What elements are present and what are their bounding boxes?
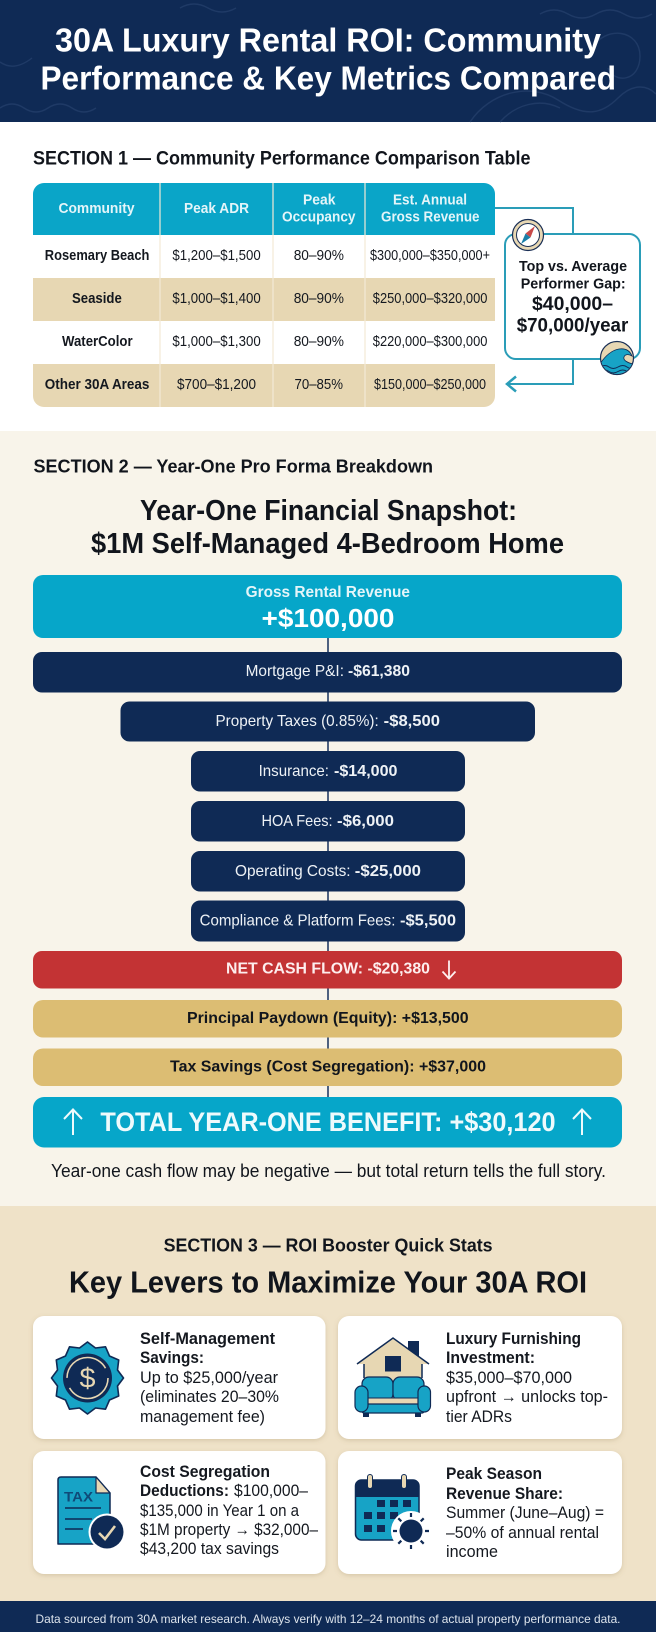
row: Rosemary Beach: Rosemary Beach — [45, 248, 149, 264]
bar: tax savings: Tax Savings (Cost Segregation): +$37,000 — [170, 1058, 486, 1076]
row: Rosemary Beach: $1,200–$1,500 — [172, 248, 261, 264]
comparison table — [33, 183, 495, 407]
callout: performer gap: $40,000– — [532, 293, 613, 315]
icon: tax document: TAX — [64, 1490, 93, 1504]
callout: performer gap — [505, 220, 640, 378]
icon: tax document — [58, 1477, 126, 1550]
bar: total year-one benefit — [33, 1097, 622, 1148]
row: Other 30A Areas: $150,000–$250,000 — [374, 377, 486, 393]
row: Seaside: Seaside — [72, 291, 122, 307]
footer: Data sourced from 30A market research. Always verify with 12–24 months of actual property performance data. — [36, 1612, 620, 1626]
card text: Investment: — [446, 1349, 535, 1367]
row: Other 30A Areas — [45, 377, 486, 393]
bar: gross rental revenue: Gross Rental Revenue — [246, 584, 410, 601]
section 1 heading: SECTION 1 — Community Performance Comparison Table — [33, 148, 530, 170]
icon: calendar and sun — [356, 1474, 431, 1551]
card text — [140, 1330, 279, 1426]
card text: Cost Segregation — [140, 1463, 270, 1481]
card text: $100,000– — [234, 1482, 309, 1500]
table header row: Occupancy — [282, 210, 356, 226]
bar: HOA fees — [191, 801, 465, 842]
card text: $1M property → $32,000– — [140, 1521, 319, 1539]
bar: insurance: Insurance: — [259, 763, 329, 780]
snapshot title — [91, 495, 564, 560]
bar: mortgage: Mortgage P&I: — [246, 663, 344, 680]
row: Seaside: $250,000–$320,000 — [373, 291, 487, 307]
row: Seaside: $1,000–$1,400 — [172, 291, 261, 307]
card text: Luxury Furnishing — [446, 1330, 581, 1348]
row: Seaside: 80–90% — [294, 291, 344, 307]
arrow: table to callout and back — [495, 208, 573, 392]
section 1 background — [0, 122, 656, 431]
bar: mortgage — [33, 652, 622, 692]
card text: (eliminates 20–30% — [140, 1388, 279, 1406]
card text: Savings: — [140, 1349, 204, 1367]
icon: dollar badge: $ — [80, 1362, 96, 1394]
icon: compass — [512, 220, 544, 250]
callout: performer gap: Top vs. Average — [519, 258, 627, 275]
card text: Self-Management — [140, 1330, 275, 1348]
row: WaterColor — [62, 334, 487, 350]
panel: section 3 quick stats — [0, 1206, 656, 1601]
card text: tier ADRs — [446, 1408, 512, 1426]
key levers title: Key Levers to Maximize Your 30A ROI — [69, 1264, 587, 1300]
waterfall connector — [327, 638, 329, 1097]
bar: mortgage: -$61,380 — [348, 663, 410, 680]
table header row: Est. Annual — [393, 193, 467, 209]
row: Other 30A Areas: $700–$1,200 — [177, 377, 256, 393]
bar: operating costs — [191, 851, 465, 892]
bar: property taxes: -$8,500 — [384, 713, 440, 730]
panel: section 2 pro forma — [0, 431, 656, 1206]
section 3 heading: SECTION 3 — ROI Booster Quick Stats — [164, 1234, 493, 1256]
table header row: Peak — [303, 193, 336, 209]
table header row: Community — [58, 201, 134, 217]
bar: operating costs: -$25,000 — [355, 863, 421, 880]
title — [40, 22, 616, 96]
snapshot title: Year-One Financial Snapshot: — [140, 495, 517, 527]
card text: upfront → unlocks top- — [446, 1388, 608, 1406]
bar: net cash flow — [33, 951, 622, 988]
card text: Peak Season — [446, 1465, 542, 1483]
row: Rosemary Beach: $300,000–$350,000+ — [370, 248, 490, 264]
bar: property taxes: Property Taxes (0.85%): — [216, 713, 379, 730]
snapshot title: $1M Self-Managed 4-Bedroom Home — [91, 528, 564, 560]
card text: income — [446, 1543, 498, 1561]
row: Rosemary Beach — [45, 248, 490, 264]
table header row — [58, 193, 480, 226]
bar: insurance — [191, 751, 465, 792]
callout: performer gap: $70,000/year — [517, 315, 629, 337]
bar: operating costs: Operating Costs: — [235, 863, 351, 880]
icon: house and sofa — [355, 1338, 430, 1417]
bar: insurance: -$14,000 — [334, 763, 398, 780]
bar: tax savings — [33, 1048, 622, 1086]
bar: HOA fees: -$6,000 — [337, 813, 394, 830]
bar: net cash flow: NET CASH FLOW: -$20,380 — [226, 960, 430, 978]
card text — [140, 1463, 319, 1558]
bar: principal paydown: Principal Paydown (Equity): +$13,500 — [187, 1010, 469, 1027]
card text: Up to $25,000/year — [140, 1369, 278, 1387]
header banner — [0, 0, 656, 122]
card text — [446, 1330, 608, 1426]
section 2 heading: SECTION 2 — Year-One Pro Forma Breakdown — [34, 456, 433, 476]
card: cost segregation deductions — [33, 1451, 326, 1574]
bar: compliance and platform fees — [191, 900, 465, 942]
card text: Deductions: — [140, 1482, 229, 1500]
card: peak season revenue share — [338, 1451, 622, 1574]
card text: management fee) — [140, 1408, 265, 1426]
bar: gross rental revenue — [33, 575, 622, 638]
row: Other 30A Areas: Other 30A Areas — [45, 377, 149, 393]
bar: principal paydown — [33, 1000, 622, 1038]
row: WaterColor: 80–90% — [294, 334, 344, 350]
row: WaterColor: $1,000–$1,300 — [172, 334, 261, 350]
icon: dollar badge — [52, 1342, 124, 1414]
bar: gross rental revenue: +$100,000 — [262, 603, 394, 633]
icon: up arrows — [64, 1110, 591, 1135]
bar: HOA fees: HOA Fees: — [262, 813, 333, 830]
card text: $35,000–$70,000 — [446, 1369, 572, 1387]
bar: total year-one benefit: TOTAL YEAR-ONE BENEFIT: +$30,120 — [100, 1107, 556, 1137]
card: self-management savings — [33, 1316, 326, 1439]
icon: wave badge — [600, 342, 636, 378]
row: Other 30A Areas: 70–85% — [294, 377, 343, 393]
card text: Revenue Share: — [446, 1485, 563, 1503]
footer — [0, 1601, 656, 1632]
card: luxury furnishing investment — [338, 1316, 622, 1439]
bar: property taxes — [120, 702, 535, 742]
icon: down arrow — [442, 960, 456, 978]
card text: $135,000 in Year 1 on a — [140, 1502, 300, 1520]
bar: compliance and platform fees: -$5,500 — [400, 912, 456, 930]
title: 30A Luxury Rental ROI: Community — [55, 22, 602, 58]
card text: –50% of annual rental — [446, 1524, 599, 1542]
table header row: Peak ADR — [184, 201, 249, 217]
card text: $43,200 tax savings — [140, 1540, 279, 1558]
card text: Summer (June–Aug) = — [446, 1504, 604, 1522]
bar: compliance and platform fees: Compliance & Platform Fees: — [200, 912, 395, 930]
table header row: Gross Revenue — [381, 210, 480, 226]
note: Year-one cash flow may be negative — but total return tells the full story. — [51, 1161, 606, 1181]
row: WaterColor: WaterColor — [62, 334, 133, 350]
card text — [446, 1465, 604, 1561]
row: Rosemary Beach: 80–90% — [294, 248, 344, 264]
row: WaterColor: $220,000–$300,000 — [373, 334, 487, 350]
callout: performer gap: Performer Gap: — [521, 276, 626, 292]
row: Seaside — [72, 291, 487, 307]
title: Performance & Key Metrics Compared — [40, 60, 616, 96]
